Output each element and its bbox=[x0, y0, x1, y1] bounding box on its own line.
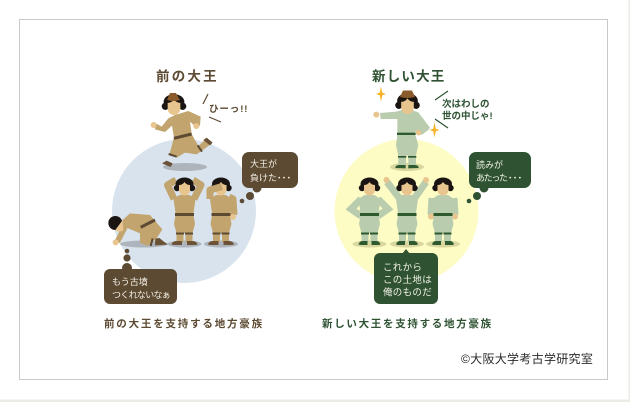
heading: new great king: 新しい大王 bbox=[372, 68, 446, 84]
figure: kneeling clan head bbox=[108, 213, 168, 248]
speech bubble: no more tombs: もう古墳 bbox=[112, 276, 148, 287]
speech bubble: this land is mine: これから bbox=[383, 262, 422, 274]
exclamation: my era: 世の中じゃ! bbox=[442, 110, 493, 122]
speech bubble: this land is mine: この土地は bbox=[383, 274, 432, 286]
caption: clans supporting previous king: 前の大王を支持する地方豪族 bbox=[104, 317, 264, 330]
heading: previous great king: 前の大王 bbox=[156, 68, 219, 84]
speech bubble: as predicted: あたった bbox=[476, 173, 508, 183]
figure: fleeing king bbox=[151, 93, 213, 171]
speech bubble: the king lost: 負けた bbox=[250, 173, 277, 183]
figure: new king bbox=[373, 90, 430, 171]
speech bubble: as predicted bbox=[467, 152, 531, 203]
exclamation: hiiii: ひーっ!! bbox=[209, 104, 248, 115]
speech bubble: the king lost: ･･･ bbox=[277, 173, 291, 183]
icon: sparkle right bbox=[430, 122, 440, 138]
speech bubble: no more tombs: つくれないなぁ bbox=[112, 290, 170, 300]
speech bubble: as predicted: ･･･ bbox=[508, 173, 522, 183]
icon: sparkle left bbox=[376, 86, 386, 102]
speech bubble: this land is mine bbox=[374, 249, 438, 304]
figure: clan head with hands on head bbox=[168, 178, 202, 248]
figure: clan head arms raised bbox=[384, 177, 429, 248]
exclamation: my era bbox=[435, 91, 493, 128]
figure: clan head arms down bbox=[426, 178, 460, 248]
blue background circle bbox=[112, 139, 256, 283]
speech bubble: as predicted: 読みが bbox=[476, 159, 503, 170]
speech bubble: the king lost: 大王が bbox=[250, 158, 277, 169]
yellow background circle bbox=[334, 139, 478, 283]
panel: previous great king bbox=[104, 68, 298, 330]
speech bubble: the king lost bbox=[240, 152, 298, 203]
figure: clan head covering eyes bbox=[204, 178, 238, 248]
speech bubble: this land is mine: 俺のものだ bbox=[383, 286, 432, 298]
copyright credit: ©大阪大学考古学研究室 bbox=[461, 351, 593, 366]
figure: clan head hands on hips bbox=[351, 178, 388, 248]
speech bubble: no more tombs bbox=[104, 249, 177, 304]
caption: clans supporting new king: 新しい大王を支持する地方豪族 bbox=[322, 317, 493, 330]
panel: new great king bbox=[322, 68, 531, 330]
exclamation: hiiii bbox=[203, 94, 248, 122]
exclamation: my era: 次はわしの bbox=[442, 98, 490, 110]
